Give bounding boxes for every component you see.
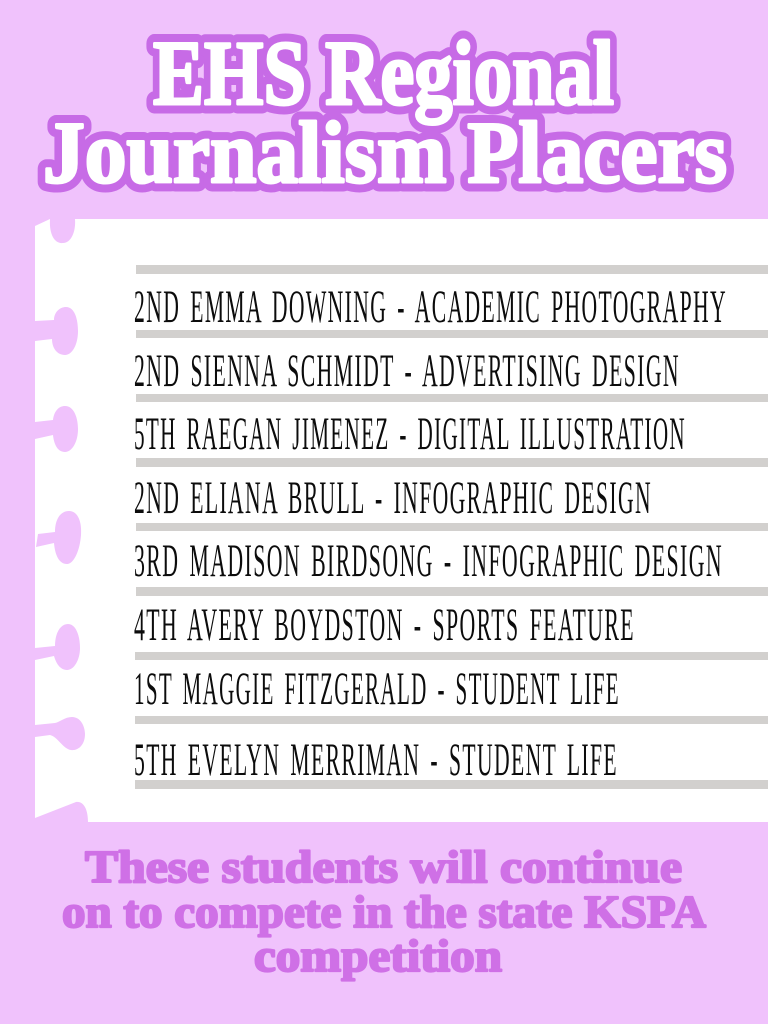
title: EHS Regional <box>153 22 614 124</box>
placer list <box>134 281 727 786</box>
title: EHS Regional <box>153 22 614 124</box>
closing message: on to compete in the state KSPA <box>62 886 706 937</box>
title <box>43 22 727 202</box>
closing message: These students will continue <box>85 841 682 892</box>
ruled lines <box>135 265 768 789</box>
icon: binder holes <box>35 219 85 750</box>
closing message: competition <box>254 930 502 981</box>
title: Journalism Placers <box>43 105 727 202</box>
closing message <box>62 841 706 981</box>
title: Journalism Placers <box>43 105 727 202</box>
panel: notebook paper <box>35 219 768 822</box>
